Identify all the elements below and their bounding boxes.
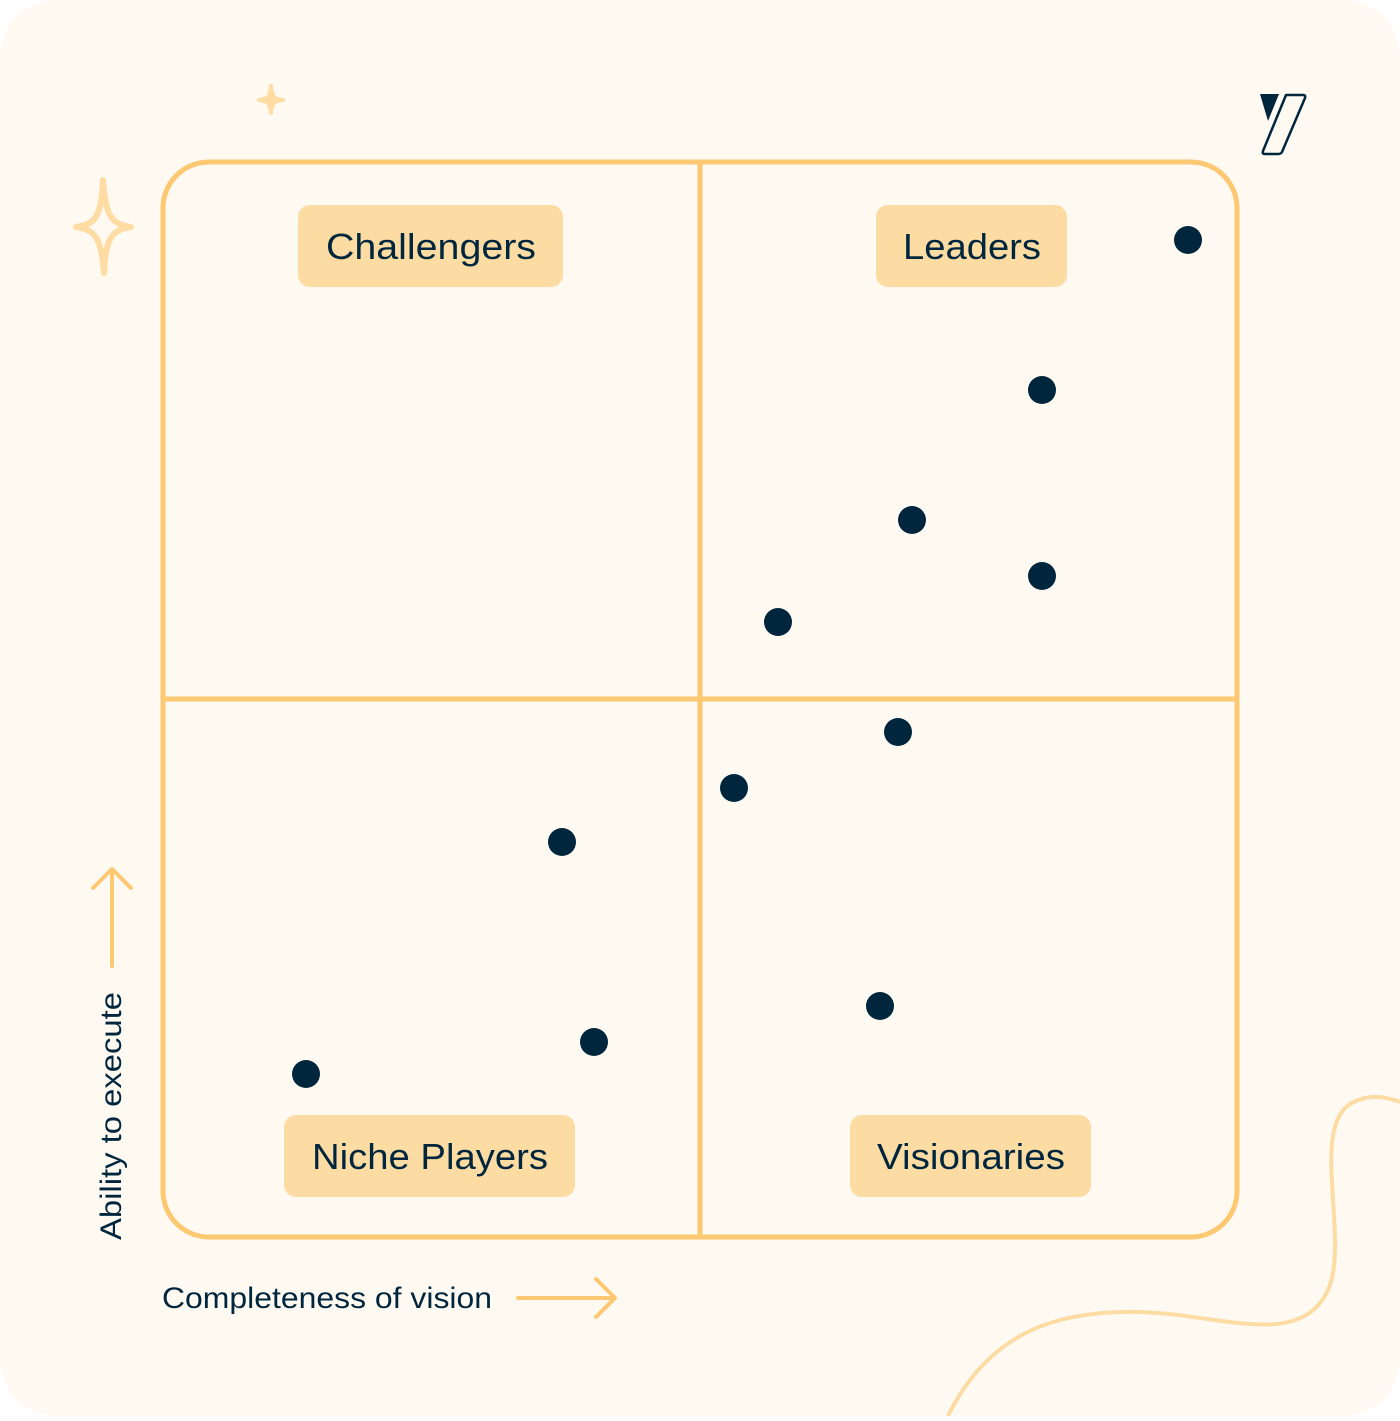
label: Leaders xyxy=(876,205,1067,287)
y-axis label: Ability to execute xyxy=(95,992,128,1240)
icon: small sparkle xyxy=(259,86,283,113)
x-axis label: Completeness of vision xyxy=(162,1282,492,1315)
icon: logo xyxy=(1260,94,1305,154)
label: Visionaries: Visionaries xyxy=(877,1136,1065,1177)
quadrant chart xyxy=(163,162,1237,1237)
label: Niche Players: Niche Players xyxy=(312,1136,548,1177)
arrow: right xyxy=(518,1279,615,1317)
decorative curve xyxy=(948,1097,1400,1416)
label: Niche Players xyxy=(284,1115,575,1197)
label: Challengers xyxy=(298,205,563,287)
arrow: up xyxy=(93,869,131,966)
data points xyxy=(292,226,1202,1088)
label: Leaders: Leaders xyxy=(903,226,1041,267)
label: Challengers: Challengers xyxy=(326,226,536,267)
icon: large sparkle xyxy=(76,180,131,273)
label: Visionaries xyxy=(850,1115,1091,1197)
